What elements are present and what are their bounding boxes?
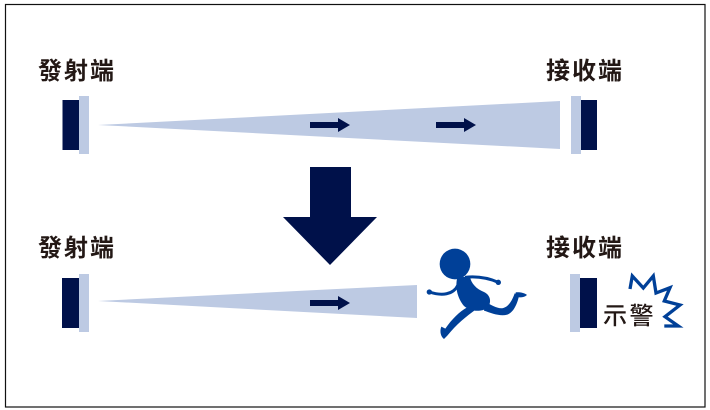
heading: bottom receiver label: 接收端	[546, 235, 624, 262]
heading: bottom transmitter label: 發射端	[38, 235, 116, 262]
top beam	[98, 101, 560, 149]
icon: running person	[427, 249, 527, 339]
arrow: top beam second	[436, 118, 476, 132]
text: alarm: 示警	[603, 303, 656, 330]
bottom beam	[98, 285, 417, 318]
icon: top receiver	[571, 96, 597, 154]
icon: alarm burst	[630, 276, 680, 326]
icon: bottom receiver	[570, 274, 597, 332]
heading: top transmitter label: 發射端	[38, 58, 116, 85]
arrow: large down arrow	[283, 167, 377, 265]
arrow: top beam first	[310, 118, 350, 132]
icon: top transmitter	[62, 96, 89, 154]
icon: bottom transmitter	[62, 274, 89, 332]
heading: top receiver label: 接收端	[546, 58, 624, 85]
arrow: bottom beam	[310, 296, 350, 310]
